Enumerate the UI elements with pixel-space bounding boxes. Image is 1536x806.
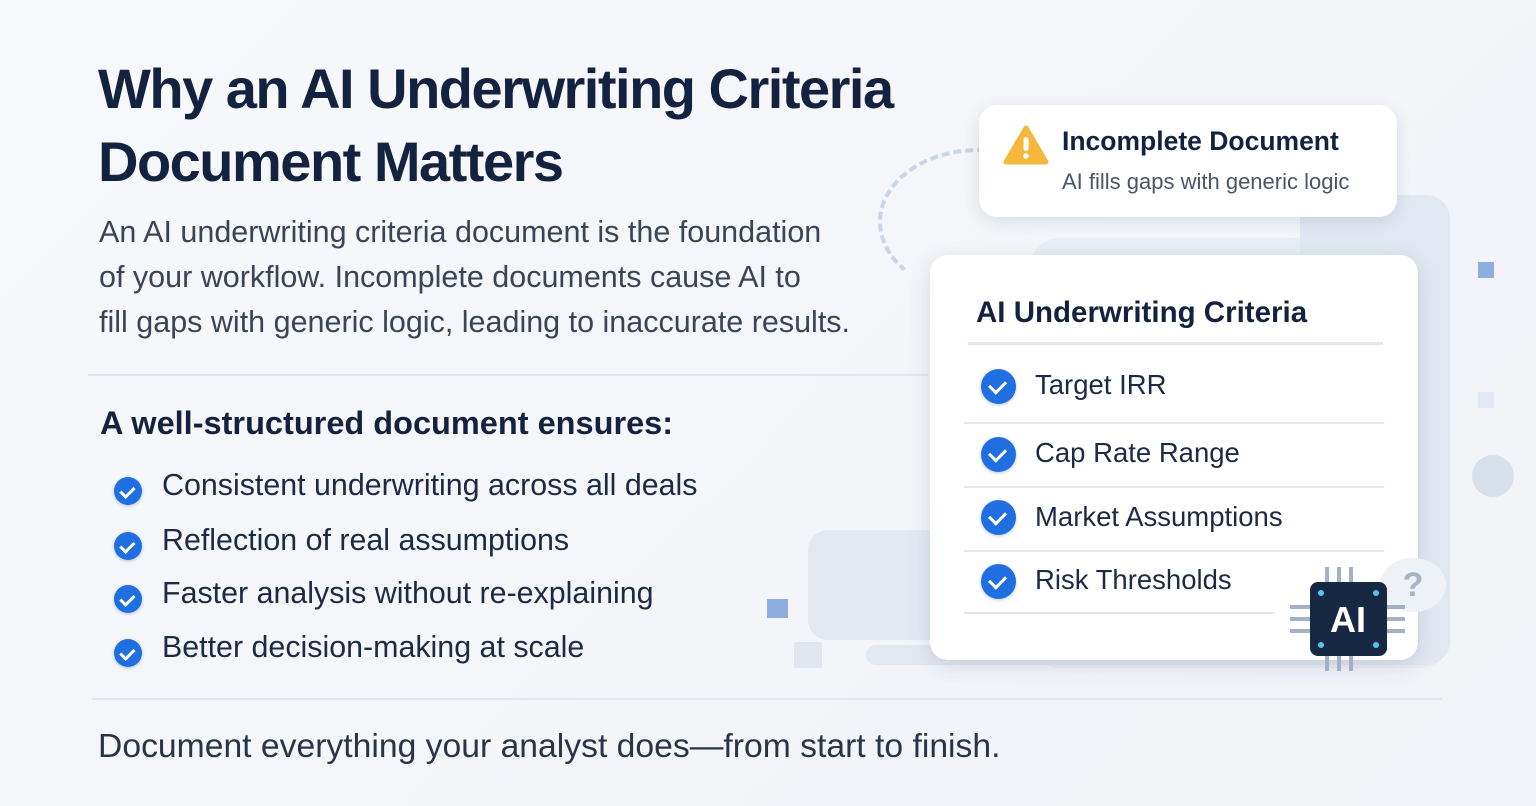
bullet list: Faster analysis without re-explaining [162, 576, 654, 610]
title: Document Matters [98, 130, 563, 193]
panel: criteria card [930, 255, 1418, 660]
intro paragraph: An AI underwriting criteria document is the foundation [99, 215, 821, 249]
intro paragraph: of your workflow. Incomplete documents cause AI to [99, 260, 801, 294]
panel: criteria card: Market Assumptions [1035, 501, 1283, 532]
callout: incomplete document [979, 105, 1397, 217]
subheading: A well-structured document ensures: [100, 405, 673, 441]
callout: incomplete document: Incomplete Document [1062, 126, 1339, 156]
background shapes [1030, 238, 1450, 668]
callout: incomplete document: AI fills gaps with generic logic [1062, 169, 1349, 194]
title [98, 57, 894, 193]
icon: AI chip: AI [1330, 599, 1366, 640]
icon: warning [1004, 126, 1048, 164]
icon: question bubble [1380, 558, 1446, 612]
panel: criteria card: Target IRR [1035, 369, 1166, 400]
bullet list: Consistent underwriting across all deals [162, 468, 697, 502]
panel: criteria card: AI Underwriting Criteria [976, 296, 1307, 329]
panel: criteria card: Cap Rate Range [1035, 437, 1240, 468]
bullet list: Better decision-making at scale [162, 630, 584, 664]
title: Why an AI Underwriting Criteria [98, 57, 893, 120]
footer text: Document everything your analyst does—from start to finish. [98, 727, 1000, 765]
icon: question bubble: ? [1403, 566, 1423, 604]
bullet list: Reflection of real assumptions [162, 523, 569, 557]
icon: AI chip [1290, 567, 1405, 671]
intro paragraph: fill gaps with generic logic, leading to inaccurate results. [99, 305, 850, 339]
intro paragraph [99, 215, 850, 339]
panel: criteria card: Risk Thresholds [1035, 564, 1232, 595]
bullet list [112, 468, 697, 670]
